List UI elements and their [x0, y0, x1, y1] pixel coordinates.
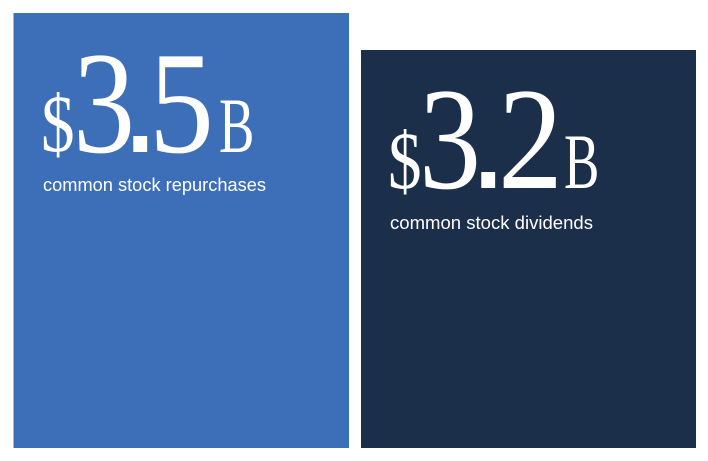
figure: $3.2B: [388, 53, 599, 220]
figure: $3.2B: $: [388, 116, 422, 207]
label: common stock dividends: common stock dividends: [390, 213, 593, 233]
panel: common stock dividends: [361, 50, 696, 448]
figure: $3.2B: 3: [419, 59, 481, 220]
figure: $3.2B: B: [564, 120, 599, 206]
figure: $3.5B: .: [120, 17, 160, 184]
figure: $3.2B: 2: [498, 58, 563, 220]
panel: common stock repurchases: [14, 13, 349, 448]
figure: $3.5B: B: [219, 84, 254, 170]
figure: $3.5B: $: [41, 79, 75, 170]
label: common stock repurchases: common stock repurchases: [43, 175, 266, 195]
figure: $3.5B: [41, 17, 254, 184]
figure: $3.5B: 5: [149, 22, 214, 184]
figure: $3.5B: 3: [73, 23, 135, 184]
figure: $3.2B: .: [468, 53, 508, 220]
